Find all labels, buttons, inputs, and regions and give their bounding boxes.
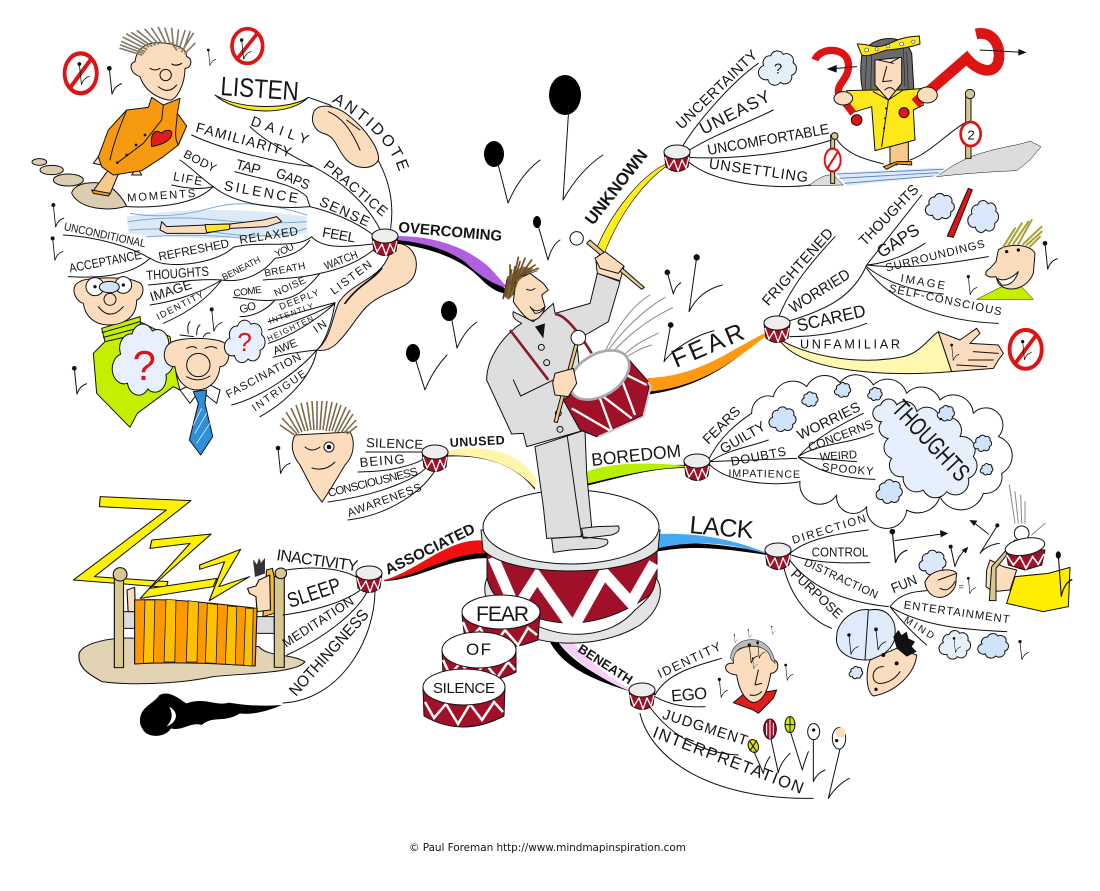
branch labels: FAMILIARITY xyxy=(194,119,294,160)
hub drums xyxy=(356,145,791,710)
unused branch labels: AWARENESS xyxy=(346,482,424,520)
small drum: of: OF xyxy=(466,640,491,659)
figure: woman with question marks xyxy=(815,33,1027,169)
branch labels: SILENCE xyxy=(223,177,299,206)
branch labels: SENSE xyxy=(317,193,372,229)
branch labels: PURPOSE xyxy=(788,566,846,622)
branch labels: DEEPLY xyxy=(278,287,321,312)
ribbon: beneath pink xyxy=(550,642,632,692)
panel: central drum xyxy=(481,490,660,643)
branch labels xyxy=(673,47,1003,351)
branch labels: ENTERTAINMENT xyxy=(903,599,1010,626)
hair xyxy=(280,401,357,436)
branch labels: FUN xyxy=(888,571,919,596)
hair xyxy=(120,27,195,55)
no-note sign left xyxy=(65,53,97,93)
thought cloud outline xyxy=(752,375,1012,528)
blanket xyxy=(135,599,257,666)
music notes xyxy=(664,255,722,362)
note balls xyxy=(746,717,849,798)
main branch titles: FEAR xyxy=(667,318,748,374)
branch labels: FEEL xyxy=(321,224,357,245)
branch labels xyxy=(63,71,452,454)
branch labels: NOISE xyxy=(273,275,308,299)
sleep illustration xyxy=(73,497,305,736)
branch labels: UNEASY xyxy=(696,86,774,139)
ribbon: overcoming purple xyxy=(396,236,508,294)
ribbon: boredom lime xyxy=(586,464,687,486)
branch labels: REFRESHED xyxy=(157,236,231,264)
branch labels: UNCERTAINTY xyxy=(673,47,761,133)
branch labels: JUDGMENT xyxy=(660,707,749,749)
small drum: of xyxy=(442,632,516,682)
figure: man in orange coat xyxy=(92,27,195,196)
figure: identity man xyxy=(718,626,793,713)
panel: unknown and fear xyxy=(664,33,1058,374)
branch labels: PRACTICE xyxy=(321,157,391,219)
main branch titles: ASSOCIATED xyxy=(382,520,478,579)
branch labels: IN xyxy=(312,318,329,336)
branch labels: GUILTY xyxy=(717,417,769,457)
main branch titles xyxy=(382,146,755,687)
ribbon: fear orange xyxy=(645,333,766,395)
panel: boredom and lack, beneath xyxy=(640,375,1072,798)
branch labels: COME xyxy=(233,285,263,300)
branch labels: INACTIVITY xyxy=(275,547,359,575)
small clouds xyxy=(769,383,993,503)
branch labels: SCARED xyxy=(795,300,867,336)
branch lines xyxy=(63,97,392,417)
ribbon: unused pale yellow xyxy=(422,448,537,490)
branch labels: UNCONDITIONAL xyxy=(63,221,147,250)
branch labels: IMAGE xyxy=(899,273,946,293)
branch labels: GAPS xyxy=(873,219,923,262)
branch labels xyxy=(650,398,1010,798)
thoughts cloud: THOUGHTS xyxy=(886,395,975,487)
main branch titles: BENEATH xyxy=(575,641,636,687)
branch labels: WATCH xyxy=(323,249,360,273)
branch labels: TAP xyxy=(234,156,263,178)
branch labels: BODY xyxy=(181,147,219,175)
branch labels: UNSETTLING xyxy=(708,156,809,186)
branch labels: SURROUNDINGS xyxy=(884,238,986,275)
bed mattress xyxy=(123,612,274,633)
copyright: © Paul Foreman http://www.mindmapinspiration.com xyxy=(409,842,686,854)
figure: brain head xyxy=(837,609,917,696)
drum zigzag xyxy=(493,557,654,628)
branch labels: DISTRACTION xyxy=(802,557,880,602)
unused branch labels xyxy=(327,435,437,520)
branch lines xyxy=(640,413,1007,798)
branch labels: RELAXED xyxy=(238,224,299,247)
black smoke with moon xyxy=(140,693,282,736)
rocky ground and water xyxy=(808,141,1041,186)
branch labels: MOMENTS xyxy=(127,188,196,205)
branch labels: FEARS xyxy=(699,403,743,447)
branch labels: INTENTLY xyxy=(268,301,315,326)
big Z letters xyxy=(73,497,249,601)
no-note sign top xyxy=(232,29,263,63)
bed posts xyxy=(113,568,287,668)
main branch titles: LACK xyxy=(688,511,755,545)
drum top xyxy=(481,530,660,571)
branch labels: INTERPRETATION xyxy=(650,723,806,798)
main branch titles: BOREDOM xyxy=(590,441,682,470)
small thought cloud: ? xyxy=(774,61,782,77)
ear upper xyxy=(312,106,378,167)
branch labels: WORRIES xyxy=(794,398,863,443)
branch labels: SPOOKY xyxy=(821,462,874,478)
figure: small head fun xyxy=(919,550,976,597)
drum on strap xyxy=(563,353,650,437)
branch labels: THOUGHTS xyxy=(146,264,209,283)
ear lower xyxy=(317,243,416,350)
branch labels: DIRECTION xyxy=(791,513,868,547)
branch labels: NOTHINGNESS xyxy=(286,607,373,700)
branch labels: WEIRD xyxy=(819,449,857,464)
figure: hand with drum and sleeve xyxy=(986,485,1072,612)
yellow crescent under LISTEN xyxy=(215,95,308,111)
branch labels: CONCERNS xyxy=(806,417,875,454)
branch labels: DAILY xyxy=(249,113,312,148)
hair xyxy=(503,257,538,300)
branch labels: ANTIDOTE xyxy=(332,94,410,172)
drumsticks xyxy=(554,343,578,423)
label: unused boy xyxy=(276,401,357,502)
sleeve and hand xyxy=(778,328,1003,374)
small drum: silence xyxy=(423,669,505,727)
main branch titles: UNUSED xyxy=(449,433,505,450)
branch labels: IMPATIENCE xyxy=(728,468,800,481)
branch labels: ACCEPTANCE xyxy=(68,248,143,276)
sleeper head xyxy=(263,568,276,617)
unused branch labels: BEING xyxy=(359,451,405,470)
branch labels: BENEATH xyxy=(220,255,262,282)
jacket xyxy=(487,273,620,447)
face xyxy=(292,432,353,502)
legs xyxy=(535,430,592,538)
figure: bald man with tie xyxy=(164,320,265,455)
clouds and slash xyxy=(925,188,999,237)
branch labels: WORRIED xyxy=(786,266,853,317)
main branch titles: UNKNOWN xyxy=(581,146,652,228)
branch labels: DOUBTS xyxy=(730,445,787,469)
branch labels: FASCINATION xyxy=(224,351,303,401)
shoes xyxy=(552,526,619,552)
ribbon: unknown yellow xyxy=(596,163,668,254)
unused branch labels: CONSCIOUSNESS xyxy=(327,466,419,500)
swimmer in water xyxy=(127,204,307,238)
figure: drummer xyxy=(487,232,673,552)
branch labels: MEDITATION xyxy=(279,593,356,651)
ribbon: associated red xyxy=(384,540,490,581)
stepping stones xyxy=(32,159,127,209)
branch lines xyxy=(283,568,375,703)
main branch titles: OVERCOMING xyxy=(398,219,503,245)
unused branch labels: SILENCE xyxy=(366,435,424,452)
ribbon: lack blue xyxy=(655,534,767,555)
branch labels: LISTEN xyxy=(220,71,300,106)
music notes xyxy=(51,49,222,394)
branch lines xyxy=(683,63,998,337)
panel: overcoming branch xyxy=(32,26,456,495)
branch labels: CONTROL xyxy=(812,545,868,560)
speed lines xyxy=(603,295,673,368)
drum body xyxy=(487,540,657,623)
figure: long nose man xyxy=(967,220,1058,299)
small drum: silence: SILENCE xyxy=(433,680,495,697)
feet xyxy=(127,587,135,612)
small drum: fear xyxy=(462,595,540,648)
small drum: fear: FEAR xyxy=(476,603,529,626)
branch labels: SELF-CONSCIOUS xyxy=(888,283,1003,319)
branch labels: UNFAMILIAR xyxy=(800,337,900,351)
branch labels: THOUGHTS xyxy=(856,182,922,249)
tightrope and posts: 2 xyxy=(967,127,975,142)
figure: small head fun: = xyxy=(958,581,964,591)
thoughts cloud xyxy=(873,395,977,498)
branch labels: GAPS xyxy=(274,165,312,193)
figure: bald man with tie: ? xyxy=(237,327,252,357)
head xyxy=(513,273,548,320)
branch labels: FRIGHTENED xyxy=(759,226,837,309)
branch labels: GO xyxy=(238,300,258,316)
branch labels: BREATH xyxy=(263,261,306,280)
large music notes xyxy=(406,75,603,390)
branch labels: AWE xyxy=(272,337,300,358)
branch labels: LISTEN xyxy=(329,259,374,297)
branch labels: SLEEP xyxy=(284,574,344,613)
branch labels: IDENTITY xyxy=(655,639,724,681)
branch labels: YOU xyxy=(273,242,296,260)
mat xyxy=(79,638,305,684)
branch labels: IMAGE xyxy=(148,277,194,305)
figure: man with glasses in green: ? xyxy=(133,342,156,389)
branch labels: IDENTITY xyxy=(155,289,206,322)
branch labels: MIND xyxy=(902,615,936,642)
straps xyxy=(510,314,592,380)
small thought cloud xyxy=(758,51,796,85)
buttons xyxy=(538,344,563,432)
branch labels: HEIGHTEN xyxy=(266,314,315,343)
tightrope and posts xyxy=(825,89,981,183)
branch labels: INTRIGUE xyxy=(250,368,309,414)
branch labels xyxy=(275,547,373,700)
panel: sleep and nothingness xyxy=(73,497,375,736)
drum lower rim xyxy=(485,578,660,643)
branch labels: EGO xyxy=(670,684,708,706)
branch labels: LIFE xyxy=(172,169,204,189)
no-note sign right xyxy=(1010,330,1042,369)
notes with arrows xyxy=(890,520,1029,660)
figure: man with glasses in green xyxy=(74,277,180,427)
branch labels: UNCOMFORTABLE xyxy=(706,122,831,159)
clock clouds xyxy=(939,631,1009,659)
